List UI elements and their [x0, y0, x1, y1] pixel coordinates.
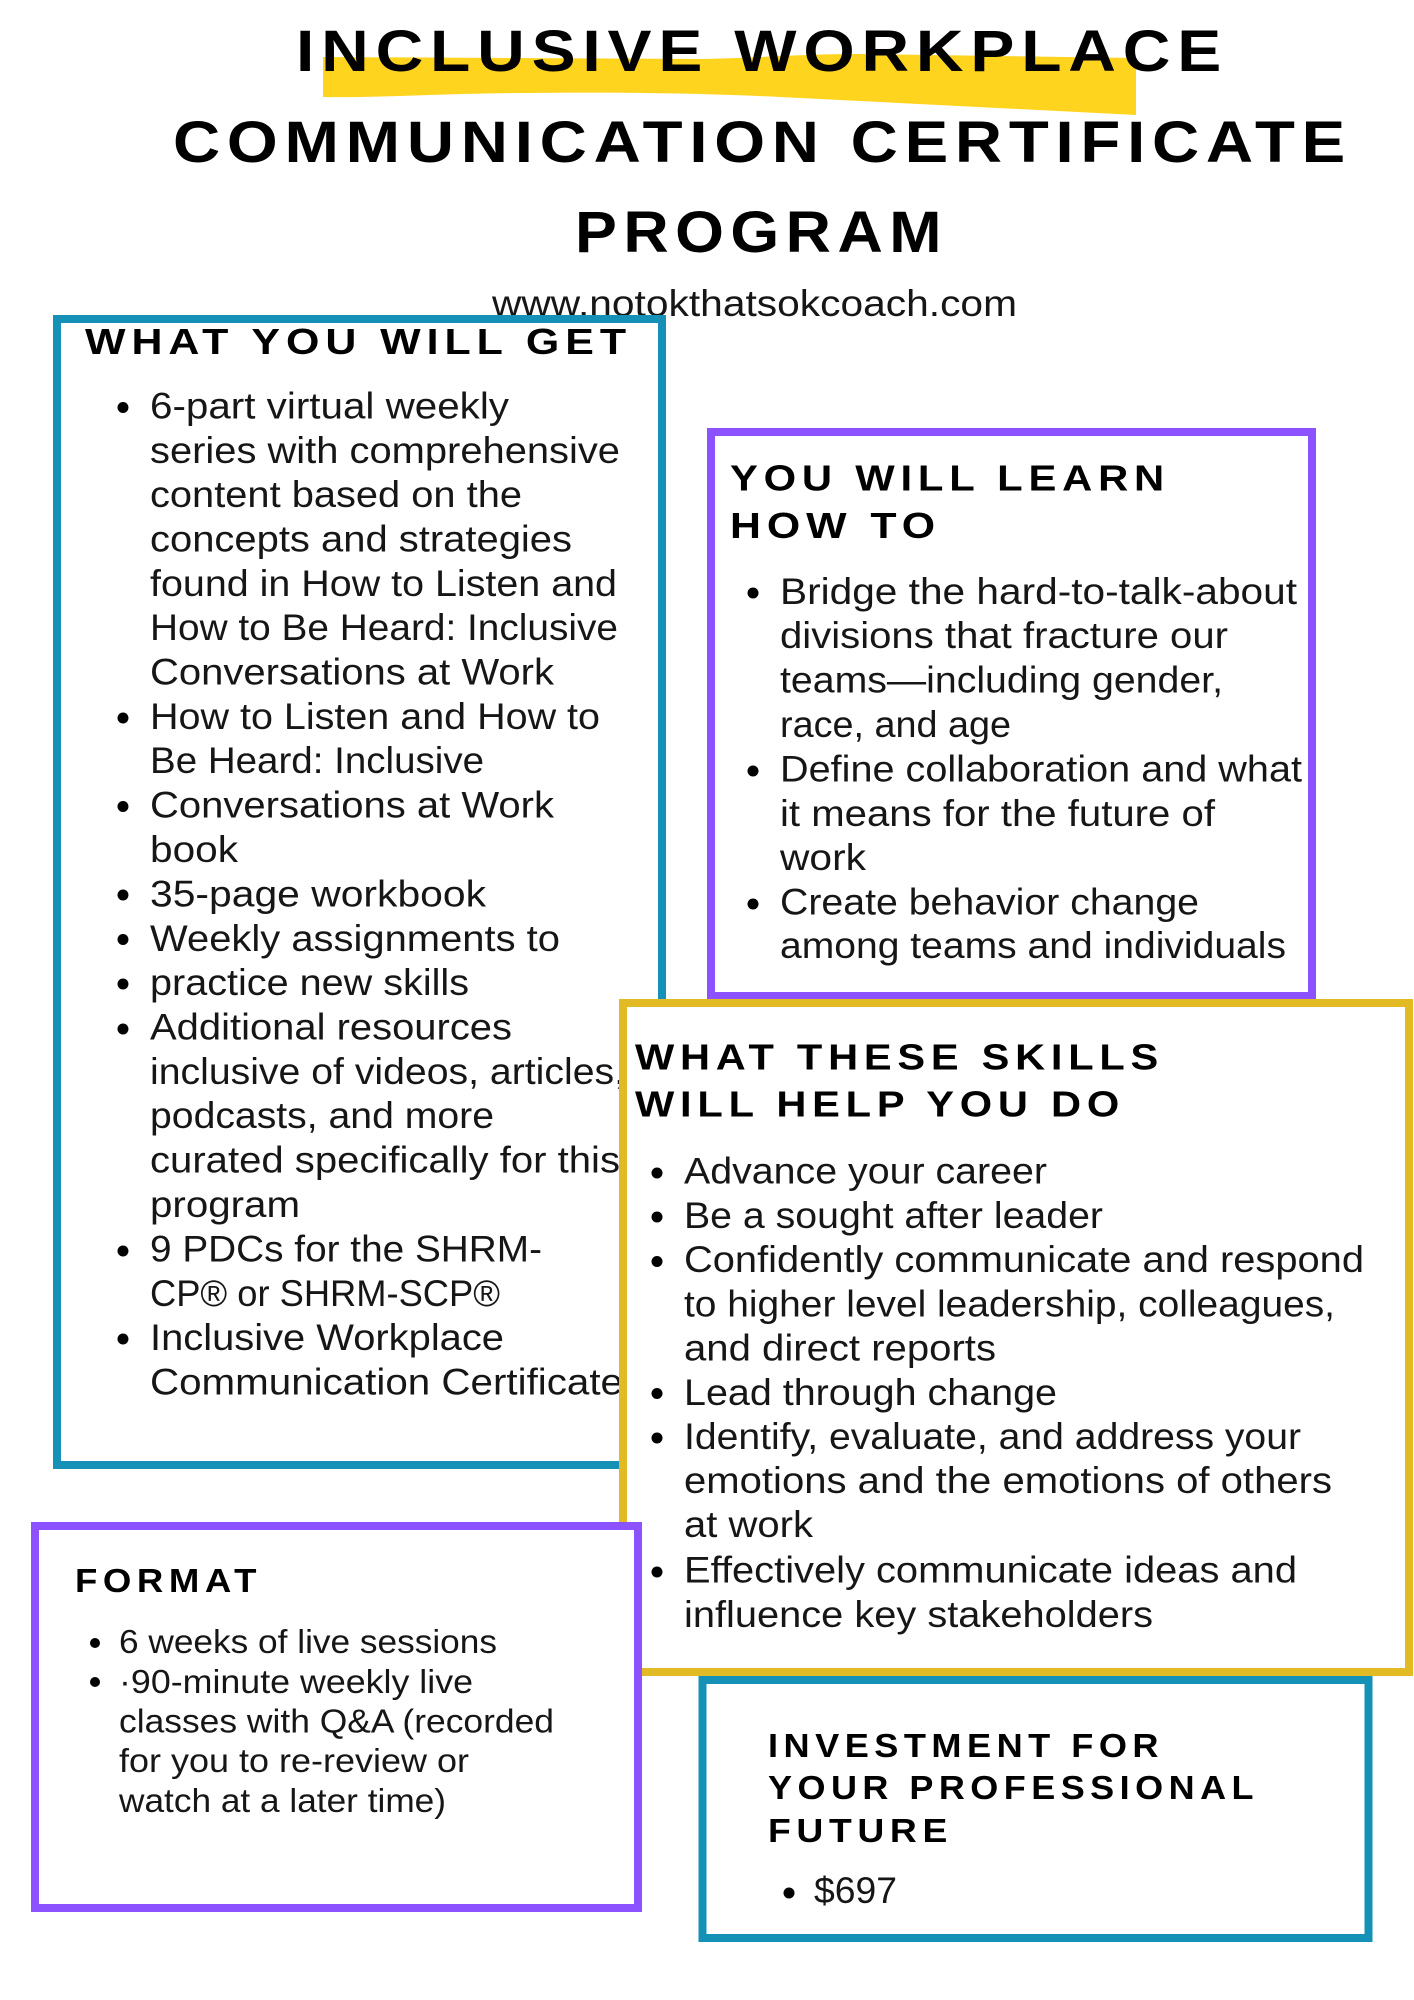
- title text: [173, 19, 1352, 265]
- heading: what these skills: WHAT THESE SKILLS: [635, 1036, 1164, 1078]
- bullet list: what you will get: inclusive of videos, articles,: [150, 1051, 625, 1092]
- bullet list: what you will get: found in How to Listen and: [150, 563, 617, 604]
- bullet list: what you will get: [118, 386, 625, 1402]
- bullet list: what you will get: 6-part virtual weekly: [150, 386, 510, 426]
- heading: investment: [768, 1727, 1259, 1849]
- bullet list: what these skills: to higher level leadership, colleagues,: [684, 1284, 1335, 1324]
- heading: you will learn how to: HOW TO: [730, 505, 941, 546]
- heading: what these skills: WILL HELP YOU DO: [635, 1084, 1125, 1124]
- panel: investment for your professional future: [702, 1680, 1368, 1938]
- bullet list: what these skills: Effectively communicate ideas and: [684, 1550, 1297, 1590]
- bullet list: what these skills: emotions and the emotions of others: [684, 1460, 1332, 1501]
- bullet list: what these skills: Confidently communicate and respond: [684, 1239, 1364, 1280]
- title text: INCLUSIVE WORKPLACE: [296, 19, 1228, 84]
- bullet list: you will learn how to: divisions that fracture our: [780, 615, 1228, 656]
- bullet list: you will learn how to: Create behavior change: [780, 882, 1199, 922]
- bullet list: what you will get: Additional resources: [150, 1006, 512, 1048]
- bullet list: what these skills: Identify, evaluate, and address your: [684, 1416, 1301, 1457]
- bullet list: format: [90, 1623, 554, 1819]
- panel: you will learn how to: [711, 432, 1312, 996]
- bullet list: you will learn how to: Bridge the hard-to-talk-about: [780, 571, 1298, 612]
- bullet list: what these skills: Be a sought after leader: [684, 1195, 1103, 1236]
- bullet list: what you will get: 9 PDCs for the SHRM-: [150, 1228, 542, 1270]
- title block: [173, 19, 1352, 265]
- bullet list: what these skills: influence key stakeholders: [684, 1594, 1153, 1635]
- heading: format: FORMAT: [75, 1562, 262, 1599]
- panel: what these skills will help you do: [623, 1003, 1409, 1672]
- bullet list: what you will get: series with comprehensive: [150, 430, 620, 471]
- bullet list: you will learn how to: among teams and individuals: [780, 925, 1286, 966]
- bullet list: format: ·90-minute weekly live: [119, 1663, 473, 1700]
- bullet list: what these skills: [652, 1150, 1364, 1635]
- bullet list: you will learn how to: race, and age: [780, 704, 1011, 745]
- title text: PROGRAM: [575, 200, 948, 265]
- heading: you will learn how to: [730, 458, 1170, 546]
- bullet list: what you will get: podcasts, and more: [150, 1095, 494, 1136]
- bullet list: format: classes with Q&A (recorded: [119, 1702, 554, 1740]
- bullet list: what you will get: Inclusive Workplace: [150, 1317, 504, 1358]
- heading: what you will get: WHAT YOU WILL GET: [85, 321, 632, 362]
- bullet list: what you will get: CP® or SHRM-SCP®: [150, 1273, 500, 1314]
- bullet list: what you will get: concepts and strategies: [150, 518, 572, 560]
- bullet list: what you will get: curated specifically for this: [150, 1140, 620, 1180]
- bullet list: what these skills: and direct reports: [684, 1328, 996, 1368]
- bullet list: format: watch at a later time): [118, 1782, 446, 1819]
- bullet list: what you will get: Conversations at Work: [150, 652, 555, 692]
- bullet list: what you will get: book: [150, 829, 239, 870]
- bullet list: what these skills: Lead through change: [684, 1372, 1057, 1413]
- bullet list: what you will get: Weekly assignments to: [150, 918, 560, 959]
- bullet list: what these skills: Advance your career: [684, 1150, 1047, 1192]
- website url: www.notokthatsokcoach.com: [491, 283, 1017, 324]
- bullet list: what you will get: Conversations at Work: [150, 784, 555, 826]
- heading: investment: INVESTMENT FOR: [768, 1727, 1164, 1764]
- yellow highlight stroke: [323, 54, 1136, 115]
- heading: investment: YOUR PROFESSIONAL: [768, 1769, 1259, 1806]
- bullet list: you will learn how to: teams—including gender,: [780, 660, 1223, 700]
- bullet list: what you will get: Communication Certificate: [150, 1362, 623, 1402]
- bullet list: you will learn how to: Define collaboration and what: [780, 748, 1303, 790]
- panel: format: [35, 1526, 638, 1908]
- heading: you will learn how to: YOU WILL LEARN: [730, 458, 1170, 498]
- bullet list: you will learn how to: it means for the future of: [780, 793, 1216, 834]
- bullet list: what you will get: Be Heard: Inclusive: [150, 740, 484, 781]
- bullet list: what you will get: practice new skills: [150, 962, 469, 1003]
- heading: what these skills: [635, 1036, 1164, 1124]
- bullet list: what you will get: How to Be Heard: Inclusive: [150, 607, 618, 648]
- bullet list: what these skills: at work: [684, 1504, 814, 1545]
- bullet list: format: for you to re-review or: [119, 1742, 469, 1779]
- bullet list: you will learn how to: [748, 571, 1303, 966]
- bullet list: what you will get: How to Listen and How to: [150, 696, 600, 737]
- bullet list: format: 6 weeks of live sessions: [119, 1623, 497, 1660]
- bullet list: what you will get: 35-page workbook: [150, 874, 487, 914]
- heading: investment: FUTURE: [768, 1812, 953, 1849]
- bullet list: what you will get: content based on the: [150, 474, 522, 515]
- price bullet: $697: [814, 1870, 897, 1911]
- title text: COMMUNICATION CERTIFICATE: [173, 110, 1352, 175]
- bullet list: you will learn how to: work: [779, 837, 867, 878]
- bullet list: what you will get: program: [150, 1184, 300, 1225]
- panel: what you will get: [57, 319, 662, 1465]
